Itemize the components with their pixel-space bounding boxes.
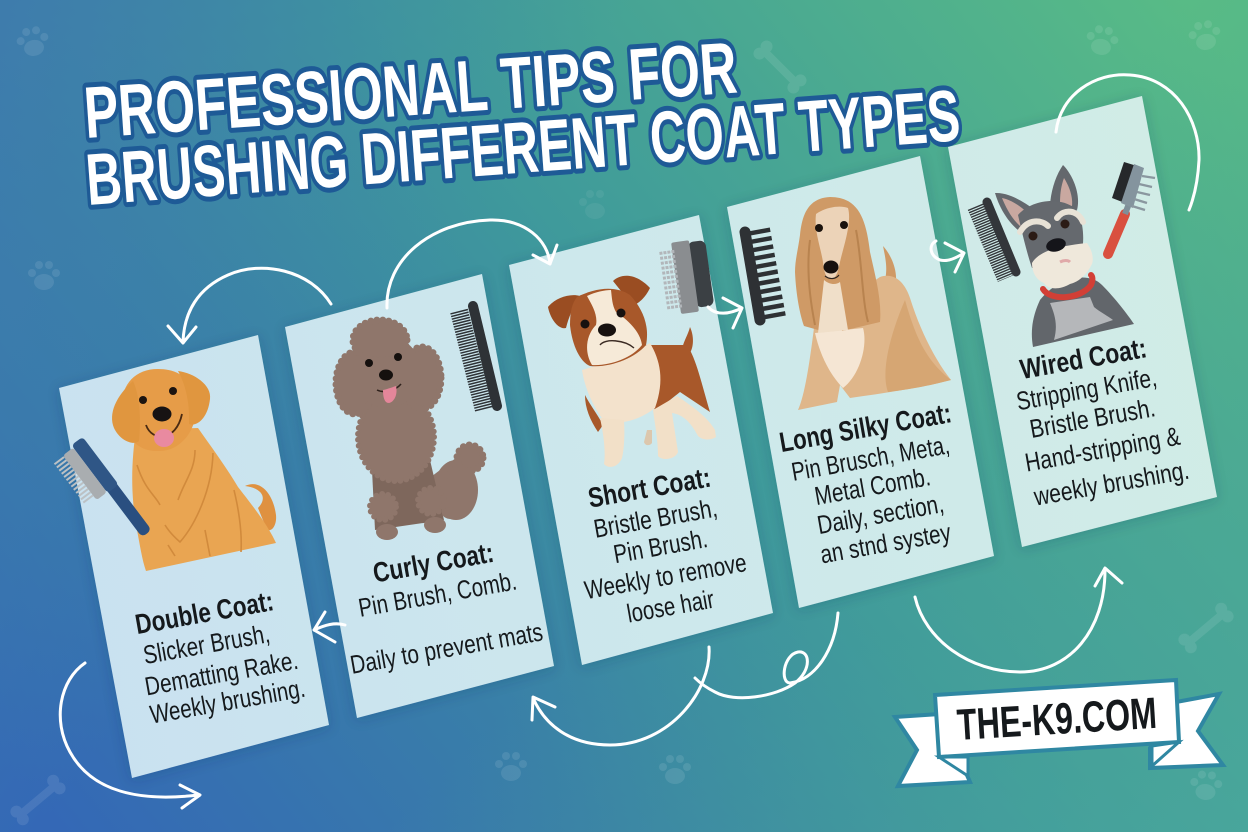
text: short coat bbox=[582, 462, 749, 629]
panel: short coat bbox=[509, 215, 773, 665]
icon: slicker brush bbox=[51, 437, 152, 553]
text: curly coat bbox=[348, 537, 545, 680]
arrow: bottom right arc bbox=[915, 568, 1122, 672]
text: short coat: Short Coat: bbox=[586, 462, 713, 514]
text: curly coat: Pin Brush, Comb. bbox=[356, 565, 519, 623]
text: double coat: Double Coat: bbox=[133, 585, 276, 640]
panel: long silky coat bbox=[727, 156, 994, 608]
panel: curly coat bbox=[285, 274, 554, 718]
text: short coat: Pin Brush. bbox=[611, 523, 710, 569]
ribbon right fold bbox=[1152, 742, 1179, 766]
text: short coat: loose hair bbox=[625, 584, 717, 629]
arrow: bottom centre arc bbox=[532, 647, 709, 745]
text: wired coat: Stripping Knife, bbox=[1014, 362, 1159, 416]
text: short coat: Weekly to remove bbox=[582, 547, 749, 605]
ribbon centre bbox=[935, 680, 1179, 757]
icon: fine comb bbox=[977, 202, 1016, 278]
text: wired coat: Bristle Brush. bbox=[1027, 392, 1158, 444]
illustration: afghan hound bbox=[795, 197, 951, 410]
text: double coat bbox=[133, 585, 307, 730]
icon: comb bbox=[459, 306, 497, 410]
text: long silky coat: Daily, section, bbox=[815, 488, 946, 540]
icon: wide comb bbox=[745, 230, 772, 320]
illustration: golden retriever bbox=[112, 369, 276, 571]
text: long silky coat: Metal Comb. bbox=[812, 461, 933, 511]
text: double coat: Slicker Brush, bbox=[141, 618, 272, 670]
ribbon left tail bbox=[895, 714, 970, 786]
arrow: curly to short top bbox=[387, 220, 557, 308]
text: wired coat: Wired Coat: bbox=[1018, 332, 1149, 385]
text: curly coat: Curly Coat: bbox=[371, 537, 496, 589]
panel: wired coat bbox=[948, 96, 1217, 547]
arrow: curl bbox=[695, 613, 838, 698]
text: double coat: Weekly brushing. bbox=[148, 673, 307, 730]
text: wired coat: Hand-stripping & bbox=[1023, 421, 1182, 478]
ribbon left fold bbox=[939, 757, 968, 776]
arrow: curly to double side bbox=[314, 612, 345, 642]
arrow: curly to double top bbox=[168, 268, 331, 343]
ribbon right tail bbox=[1150, 694, 1223, 768]
illustration: bulldog bbox=[548, 276, 716, 467]
arrow: short to long bbox=[708, 298, 742, 328]
text: long silky coat bbox=[777, 397, 954, 569]
text: curly coat: Daily to prevent mats bbox=[348, 616, 545, 680]
text: wired coat: weekly brushing. bbox=[1031, 455, 1191, 512]
text: short coat: Bristle Brush, bbox=[591, 493, 720, 544]
text: long silky coat: an stnd systey bbox=[818, 517, 953, 569]
arrow: bottom left arc bbox=[60, 663, 200, 808]
icon: bristle brush bbox=[658, 238, 715, 316]
illustration: poodle bbox=[336, 320, 483, 540]
title: PROFESSIONAL TIPS FOR bbox=[81, 28, 740, 154]
banner: the-k9.com bbox=[895, 680, 1223, 786]
icon: stripping brush bbox=[1108, 162, 1155, 254]
text: double coat: Dematting Rake. bbox=[143, 645, 300, 701]
illustration: schnauzer bbox=[995, 165, 1134, 347]
text: long silky coat: Pin Brusch, Meta, bbox=[789, 429, 952, 487]
brand text: THE-K9.COM bbox=[956, 689, 1158, 750]
text: long silky coat: Long Silky Coat: bbox=[777, 397, 954, 458]
arrow: long to wired bbox=[931, 241, 964, 272]
arrow: top right arc bbox=[1056, 75, 1199, 210]
text: wired coat bbox=[1014, 332, 1191, 512]
panel: double coat bbox=[51, 335, 329, 778]
